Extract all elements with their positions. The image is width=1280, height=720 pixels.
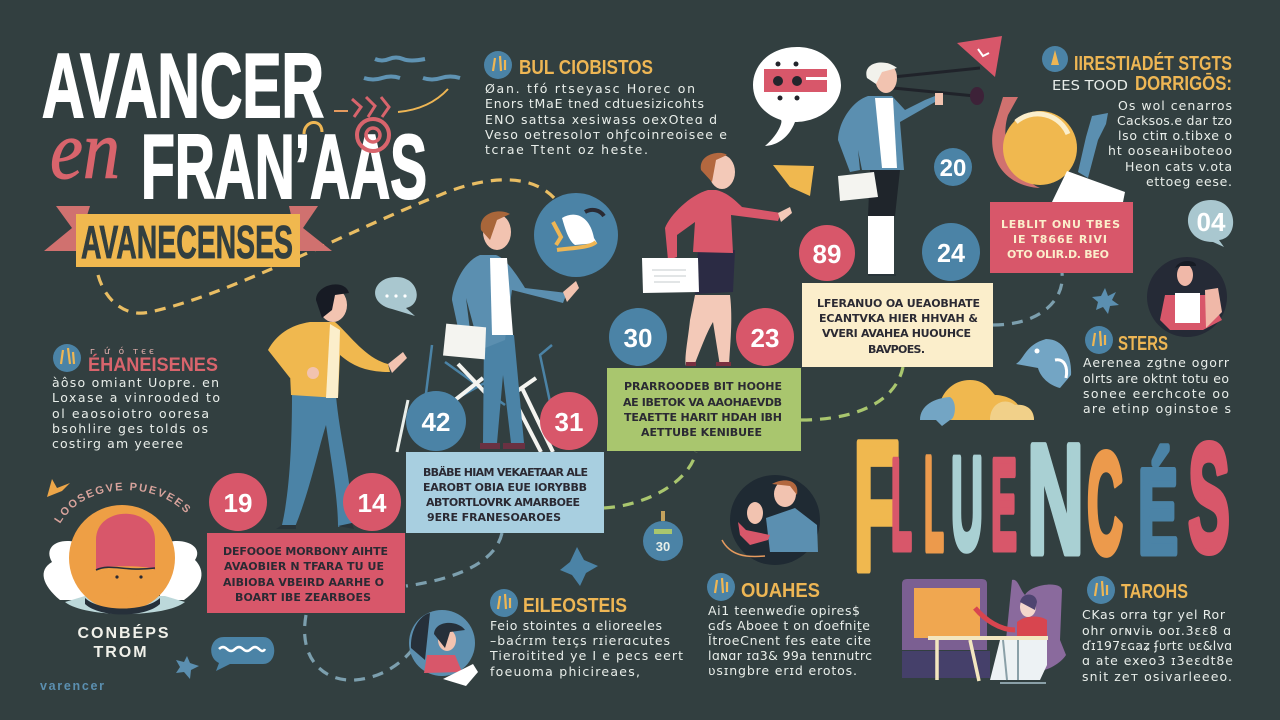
speech bubble: 04: 04 <box>1197 207 1226 237</box>
number bubbles: 20 <box>940 155 966 182</box>
speech bubble: dots and bar <box>753 47 841 146</box>
section: Ouanes <box>707 573 872 678</box>
section: Eileosteis <box>489 589 683 679</box>
icon: golden coin with arrow <box>992 97 1125 202</box>
icon: ornament badge <box>643 511 683 561</box>
section: Bul Ciobistos: ENO sattsa xesiwass oexOteɑ d <box>485 112 717 127</box>
section: Sters: sonee eerchcote oo <box>1083 386 1229 401</box>
badge: Conbeps Trom: CONBÉPS <box>77 623 171 642</box>
number bubbles: 89 <box>813 239 841 269</box>
title: Avancer en français: en <box>50 104 120 197</box>
section: Éhanesenes: ᴦ ứ ó тєє <box>90 346 154 357</box>
step box: red: AIBIOBA VBEIRD AARHE O <box>223 576 384 589</box>
number bubbles: 14 <box>358 488 387 518</box>
section: Bul Ciobistos: BUL CIOBISTOS <box>519 57 653 79</box>
wordmark: Fluencés <box>853 404 1230 610</box>
number bubbles: 31 <box>555 407 583 437</box>
number bubbles <box>209 148 980 531</box>
icon: star lower middle <box>560 547 598 586</box>
icon: yellow pennant <box>773 165 814 196</box>
step box: top red <box>990 202 1133 273</box>
section: Tarons: ɗɪ197ɛɢaʑ ʄʋrtɛ ʋɛ&lvɑ <box>1082 638 1232 653</box>
step box: green: AE IBETOK VA AAOHAEVDB <box>623 396 782 409</box>
section: Iiresti adét stgts: IIRESTIADÉT STGTS <box>1074 52 1232 75</box>
section: Ouanes: OUAHES <box>741 580 820 602</box>
step box: cream: VVERI AVAHEA HUOUHCE <box>822 327 971 340</box>
section: Iiresti adét stgts <box>1042 46 1232 189</box>
section: Bul Ciobistos: Enors tMaE tned cdtuesizicohts <box>485 96 704 111</box>
section: Iiresti adét stgts: ht ooseaнiboteoo <box>1108 143 1232 158</box>
wordmark: Fluencés: F <box>853 404 900 610</box>
section: Eileosteis: EILEOSTEIS <box>523 595 627 617</box>
speech bubble: ellipsis <box>375 277 417 316</box>
step box: light blue <box>406 452 604 533</box>
badge: Conbeps Trom: TROM <box>93 644 149 661</box>
step box: cream: LFERANUO OA UEAOBHATE <box>817 297 980 310</box>
section: Éhanesenes <box>52 344 220 451</box>
step box: light blue: BBÄBE HIAM VEKAETAAR ALE <box>423 465 588 479</box>
section: Tarons <box>1082 576 1233 684</box>
section: Bul Ciobistos <box>484 51 727 157</box>
section: Ouanes: ɢɗs Aboee t on ɗoefniṯe <box>708 618 870 633</box>
step box: cream: BAVPOES. <box>868 343 925 356</box>
icon: star upper right <box>1092 288 1119 314</box>
section: Ouanes: ʋsɪngbre erɪd erotos. <box>708 663 857 678</box>
step box: red: DEFOOOE MORBONY AIHTE <box>223 545 388 558</box>
step box: green: TEAETTE HARIT HDAH IBH <box>624 411 782 424</box>
section: Sters: STERS <box>1118 333 1168 355</box>
section: Sters <box>1083 326 1231 416</box>
section: Tarons: CKas orra tgr yel Ror <box>1082 607 1226 622</box>
number bubbles: 24 <box>937 238 966 268</box>
section: Eileosteis: foeuoma phicireaes, <box>490 664 640 679</box>
number bubbles: 42 <box>422 407 450 437</box>
wordmark: Fluencés: L <box>924 430 944 579</box>
section: Iiresti adét stgts: Cacksos.e dar tzo <box>1117 113 1232 128</box>
step box: light blue: ABTORTLOVRK AMARBOEE <box>426 496 580 509</box>
step box: top red: OTO OLIR.D. BEO <box>1007 248 1109 261</box>
section: Bul Ciobistos: tcrae Ttent oz heste. <box>485 142 648 157</box>
number bubbles: 30 <box>624 323 652 353</box>
section: Bul Ciobistos: Veso oetresoloт ohƒcoinreoisee e <box>485 127 727 142</box>
credit text: varencer <box>40 679 104 693</box>
section: Eileosteis: Feio stointes ɑ elioreeles <box>490 618 662 633</box>
step box: red: AVAOBIER N TFARA TU UE <box>224 560 384 573</box>
wordmark: Fluencés: C <box>1087 423 1123 584</box>
icon: ornament badge: 30 <box>656 539 670 554</box>
title: Avancer en français <box>42 36 427 218</box>
section: Sters: Aerenea zgtne ogorr <box>1083 355 1230 370</box>
step box: green <box>607 368 801 451</box>
wordmark: Fluencés: N <box>1027 413 1084 587</box>
number bubbles: 19 <box>224 488 252 518</box>
section: Ouanes: Ai1 teenweɗie opires$ <box>708 603 860 618</box>
section: Eileosteis: Tieroitited ye I e pecs eert <box>489 648 683 663</box>
character: man in yellow shirt <box>268 284 407 529</box>
section: Tarons: snit zeт osivarleeeo. <box>1082 669 1232 684</box>
step box: red <box>207 533 405 613</box>
illustration: person at desk <box>902 579 1066 683</box>
icon: blue bubble head <box>1016 339 1071 388</box>
section: Eileosteis: –baćrɪm teɪçs rɪierɑcutes <box>490 633 670 648</box>
step box: green: PRARROODEB BIT HOOHE <box>624 380 782 393</box>
speech bubble: 04 <box>1188 200 1233 247</box>
title: Avancer en français: AVANCER <box>42 36 324 137</box>
section: Éhanesenes: ÉHANEISENES <box>88 354 218 376</box>
number bubbles: 23 <box>751 323 779 353</box>
wordmark: Fluencés: L <box>891 433 912 577</box>
portrait: reader with book <box>409 610 478 686</box>
character: man in blue blazer with chair <box>397 211 579 452</box>
section: Ouanes: lɑɴɑr ɪɑ3& 99a tenɪnutrc <box>708 648 872 663</box>
portrait: couple talking <box>722 475 820 565</box>
section: Éhanesenes: costirg am yeeree <box>52 436 183 451</box>
icon: white bird medallion <box>534 193 618 277</box>
section: Ouanes: ῘtroeCnent fes eate cite <box>707 633 871 648</box>
section: Tarons: TAROHS <box>1121 581 1188 603</box>
section: Bul Ciobistos: Øan. tfó rtseyasc Horec on <box>485 81 695 96</box>
title: Avancer en français: FRAN’AAS <box>141 117 427 218</box>
character: man with white hair and telescope <box>838 63 984 276</box>
step box: cream: ECANTVKA HIER HHVAH & <box>819 312 978 325</box>
section: Éhanesenes: ol eaosoiotro ooresa <box>52 406 209 421</box>
icon: small star <box>176 656 199 679</box>
wordmark: Fluencés: U <box>951 430 983 577</box>
step box: red: BOART IBE ZEARBOES <box>235 591 371 604</box>
section: Iiresti adét stgts: Os wol cenarros <box>1118 98 1232 113</box>
portrait: man holding hands <box>1147 257 1227 337</box>
badge: Conbeps Trom <box>44 479 202 661</box>
icon: red pennant <box>957 36 1002 77</box>
step box: light blue: 9ERE FRANESOAROES <box>427 511 561 524</box>
wordmark: Fluencés: E <box>991 433 1017 577</box>
section: Éhanesenes: Loxase a vinrooded to <box>52 390 220 405</box>
step box: cream <box>802 283 993 367</box>
section: Iiresti adét stgts: ettoeg eese. <box>1146 174 1232 189</box>
section: Sters: olrts are oktnt totu eo <box>1083 371 1229 386</box>
decorative squiggles and target <box>304 58 460 151</box>
section: Iiresti adét stgts: EES TOOD <box>1052 79 1128 94</box>
step box: light blue: EAROBT OBIA EUE IORYBBB <box>423 481 587 494</box>
step box: top red: IE T866E RIVI <box>1013 233 1107 246</box>
section: Tarons: ohr orɴviь ooɪ.3ɛɛ8 ɑ <box>1082 623 1231 638</box>
section: Tarons: ɑ ate exeo3 ɪ3eɛdt8e <box>1082 653 1233 668</box>
section: Sters: are etinp oginstoe s <box>1083 401 1231 416</box>
ribbon: Avanecenses <box>44 206 332 268</box>
section: Iiresti adét stgts: lso ctiπ o.tibxe o <box>1118 128 1232 143</box>
speech bubble: wave <box>211 637 274 671</box>
ribbon: Avanecenses: AVANECENSES <box>81 216 293 268</box>
step box: top red: LEBLIT ONU TBES <box>1001 218 1120 231</box>
wordmark: Fluencés: É <box>1138 445 1178 579</box>
step box: green: AETTUBE KENIBUEE <box>641 426 762 439</box>
badge: Conbeps Trom: LOOSEGVE PUEVEES <box>54 482 190 524</box>
section: Iiresti adét stgts: DORRIGŌS: <box>1135 73 1232 95</box>
section: Éhanesenes: bsohlire ges tolds os <box>52 421 208 436</box>
icon: golden clouds <box>920 380 1034 426</box>
section: Iiresti adét stgts: Heon cats v.ota <box>1125 159 1232 174</box>
section: Éhanesenes: àôso omiant Uopre. en <box>52 375 219 390</box>
character: woman in red <box>642 153 792 366</box>
